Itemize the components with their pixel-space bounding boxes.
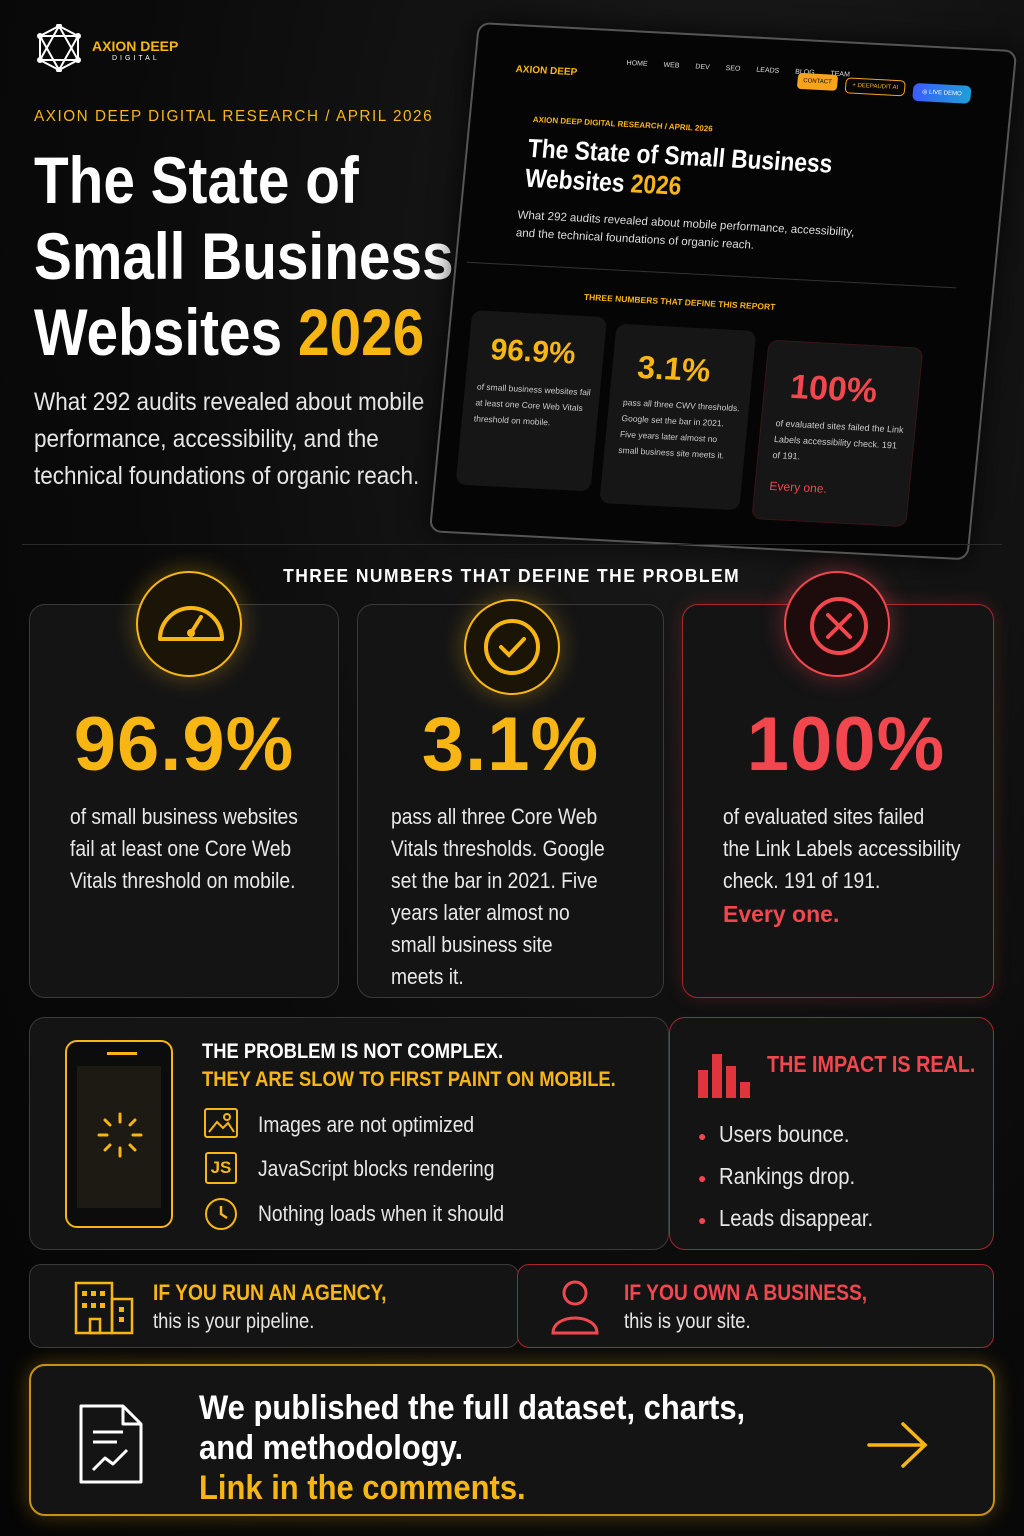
title: Websites 2026	[34, 295, 424, 369]
card 1: 96.9%	[74, 702, 294, 787]
logo: AXION DEEP	[92, 38, 178, 54]
icon: person	[552, 1280, 598, 1334]
icon: document chart	[80, 1404, 142, 1484]
website mockup: Websites 2026	[524, 163, 683, 201]
callout: dataset: and methodology.	[199, 1429, 463, 1467]
website mockup: 100%	[788, 368, 879, 410]
title	[34, 143, 454, 369]
icon: bar chart	[698, 1054, 750, 1098]
section heading: THREE NUMBERS THAT DEFINE THE PROBLEM	[283, 566, 741, 586]
icon: phone	[65, 1040, 173, 1228]
panel: impact: Leads disappear.	[719, 1205, 873, 1231]
subtitle: What 292 audits revealed about mobile	[34, 388, 424, 416]
website mockup: THREE NUMBERS THAT DEFINE THIS REPORT	[584, 292, 776, 312]
logo: DIGITAL	[112, 55, 160, 62]
card 2: meets it.	[391, 964, 464, 989]
subtitle	[34, 388, 424, 490]
title: Small Business	[34, 219, 454, 293]
card 1: fail at least one Core Web	[70, 836, 291, 861]
list: JavaScript blocks rendering	[258, 1156, 494, 1181]
card 3: the Link Labels accessibility	[723, 836, 961, 861]
list: Nothing loads when it should	[258, 1201, 504, 1226]
logo	[37, 24, 178, 72]
subtitle: technical foundations of organic reach.	[34, 462, 419, 490]
panel: business	[517, 1264, 994, 1348]
website mockup: ◎ LIVE DEMO	[922, 89, 962, 97]
panel: agency	[29, 1264, 519, 1348]
panel: business: this is your site.	[624, 1310, 751, 1333]
panel: impact: THE IMPACT IS REAL.	[767, 1051, 975, 1077]
list	[204, 1108, 504, 1230]
website mockup	[429, 22, 1017, 560]
website mockup: HOME WEB DEV SEO LEADS BLOG TEAM	[626, 60, 850, 79]
website mockup: What 292 audits revealed about mobile performance, accessibility, and the technical foundations of organic reach.	[515, 209, 855, 252]
panel: impact: ●	[698, 1212, 706, 1228]
callout: dataset	[29, 1364, 995, 1516]
card 2: years later almost no	[391, 900, 570, 925]
eyebrow: AXION DEEP DIGITAL RESEARCH / APRIL 2026	[34, 108, 433, 125]
card 2: small business site	[391, 932, 553, 957]
panel: impact	[669, 1017, 994, 1250]
panel: problem: THEY ARE SLOW TO FIRST PAINT ON MOBILE.	[202, 1068, 616, 1091]
panel: problem	[29, 1017, 669, 1250]
subtitle: performance, accessibility, and the	[34, 425, 379, 453]
title: The State of	[34, 143, 359, 217]
arrow	[867, 1422, 928, 1468]
card 3: 100%	[747, 702, 945, 787]
list: JS	[211, 1158, 231, 1177]
panel: agency: this is your pipeline.	[153, 1310, 314, 1333]
panel: problem: THE PROBLEM IS NOT COMPLEX.	[202, 1040, 503, 1063]
panel: impact: Rankings drop.	[719, 1163, 855, 1189]
website mockup: CONTACT	[803, 78, 832, 86]
website mockup: of small business websites fail at least one Core Web Vitals threshold on mobile.	[473, 381, 591, 427]
card 2	[357, 604, 664, 998]
website mockup: 96.9%	[489, 333, 577, 371]
icon: x	[784, 571, 890, 677]
website mockup: The State of Small Business	[527, 133, 834, 179]
website mockup: pass all three CWV thresholds. Google set the bar in 2021. Five years later almost no small business site meets it.	[618, 397, 740, 460]
list: Images are not optimized	[258, 1112, 474, 1137]
card 2: pass all three Core Web	[391, 804, 597, 829]
card 2: Vitals thresholds. Google	[391, 836, 605, 861]
card 2: 3.1%	[422, 702, 599, 787]
panel: impact: Users bounce.	[719, 1121, 850, 1147]
card 1: Vitals threshold on mobile.	[70, 868, 295, 893]
website mockup: 3.1%	[636, 349, 712, 389]
icon: gauge	[136, 571, 242, 677]
card 1: of small business websites	[70, 804, 298, 829]
website mockup: Every one.	[769, 479, 828, 496]
website mockup: AXION DEEP DIGITAL RESEARCH / APRIL 2026	[532, 115, 713, 133]
website mockup: + DEEPAUDIT AI	[852, 83, 898, 91]
card 2: set the bar in 2021. Five	[391, 868, 598, 893]
panel: agency: IF YOU RUN AN AGENCY,	[153, 1280, 387, 1305]
callout: dataset: We published the full dataset, charts,	[199, 1389, 745, 1427]
website mockup: of evaluated sites failed the Link Labels accessibility check. 191 of 191.	[772, 418, 904, 461]
panel: impact: ●	[698, 1170, 706, 1186]
website mockup: AXION DEEP	[515, 64, 578, 78]
icon: check	[464, 599, 560, 695]
card 1	[29, 604, 339, 998]
card 3: of evaluated sites failed	[723, 804, 924, 829]
panel: business: IF YOU OWN A BUSINESS,	[624, 1280, 867, 1305]
panel: impact: ●	[698, 1128, 706, 1144]
card 3	[682, 604, 994, 998]
icon: building	[74, 1282, 134, 1334]
card 3: Every one.	[723, 901, 839, 927]
callout: dataset: Link in the comments.	[199, 1469, 526, 1507]
card 3: check. 191 of 191.	[723, 868, 880, 893]
